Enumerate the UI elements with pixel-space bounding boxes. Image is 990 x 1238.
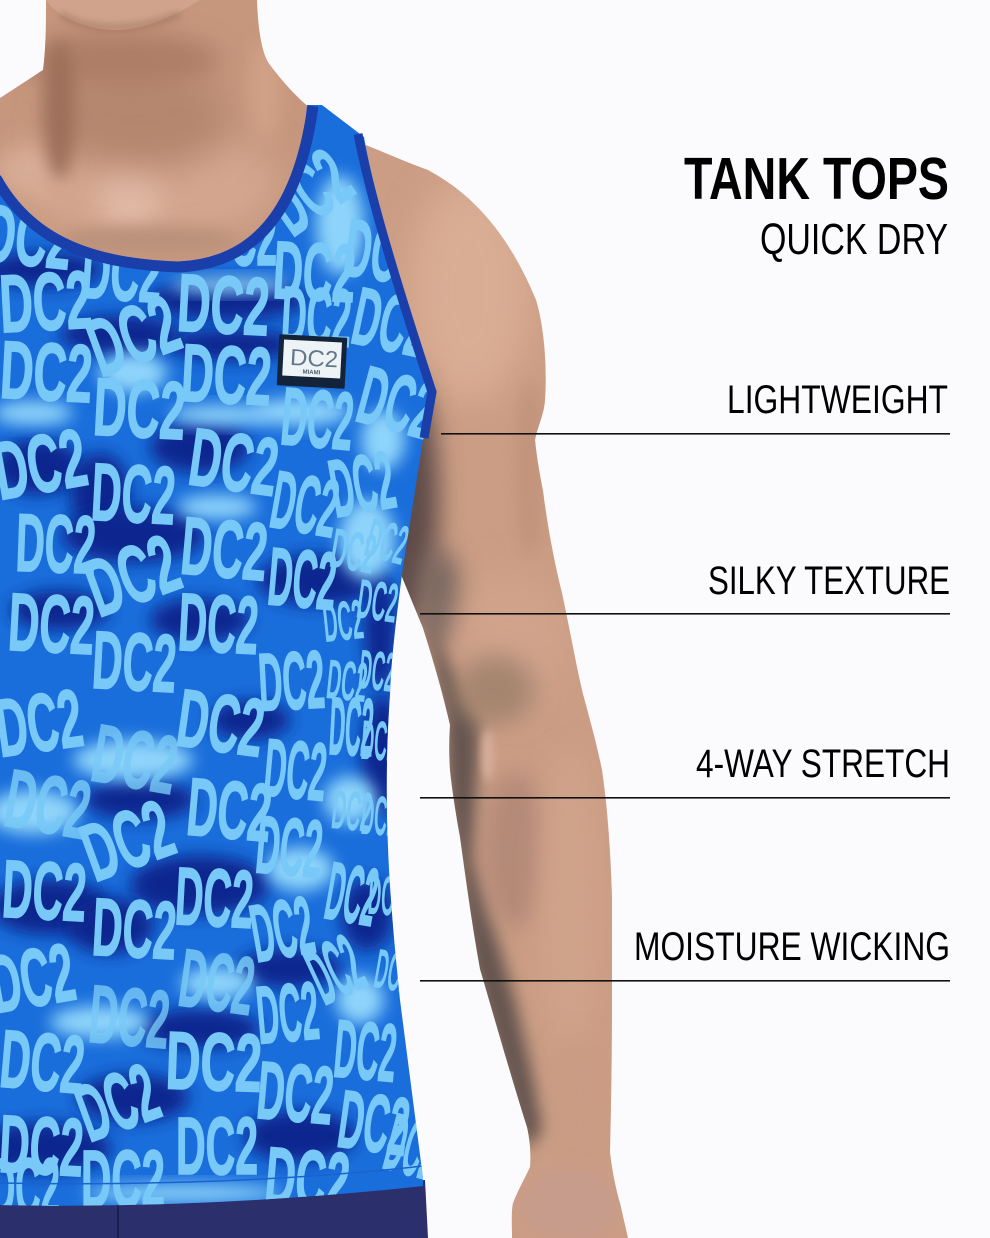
DC2 pattern: DC2 <box>359 708 400 773</box>
DC2 pattern: DC2 <box>253 799 326 896</box>
DC2 pattern: DC2 <box>81 1134 165 1225</box>
arm and shoulder <box>365 144 628 1238</box>
DC2 pattern: DC2 <box>0 1014 88 1112</box>
DC2 pattern: DC2 <box>90 615 179 710</box>
DC2 pattern: DC2 <box>79 224 165 321</box>
DC2 pattern: DC2 <box>0 255 94 350</box>
DC2 pattern: DC2 <box>324 647 370 714</box>
DC2 pattern: DC2 <box>184 762 275 860</box>
DC2 pattern: DC2 <box>349 350 446 457</box>
DC2 pattern: DC2 <box>0 844 89 939</box>
DC2 pattern: DC2 <box>319 846 384 944</box>
patch logo text: DC2 <box>290 344 339 372</box>
DC2 pattern: DC2 <box>86 708 184 812</box>
DC2 pattern: DC2 <box>74 518 191 635</box>
DC2 pattern: DC2 <box>339 203 425 303</box>
DC2 pattern: DC2 <box>254 1045 337 1142</box>
DC2 pattern: DC2 <box>184 412 284 514</box>
armhole trim <box>358 134 432 438</box>
DC2 pattern: DC2 <box>279 270 354 365</box>
DC2 pattern: DC2 <box>366 863 407 928</box>
DC2 pattern: DC2 <box>320 587 366 654</box>
DC2 pattern: DC2 <box>356 637 398 704</box>
DC2 pattern: DC2 <box>176 577 261 672</box>
DC2 pattern: DC2 <box>278 371 357 468</box>
DC2 pattern: DC2 <box>0 753 97 857</box>
DC2 pattern: DC2 <box>89 447 178 542</box>
DC2 pattern: DC2 <box>360 506 415 577</box>
DC2 pattern: DC2 <box>70 783 185 899</box>
figure: torso and arm <box>0 0 640 1238</box>
DC2 pattern: DC2 <box>175 258 272 353</box>
DC2 pattern: DC2 <box>76 278 191 394</box>
DC2 pattern: DC2 <box>253 966 322 1062</box>
neckline trim <box>0 106 313 267</box>
DC2 pattern: DC2 <box>333 1074 415 1174</box>
DC2 pattern: DC2 <box>176 1101 258 1192</box>
DC2 pattern: DC2 <box>203 192 277 283</box>
DC2 pattern: DC2 <box>6 577 97 672</box>
DC2 pattern: DC2 <box>178 501 271 599</box>
DC2 pattern: DC2 <box>264 454 345 555</box>
tank top <box>0 100 448 1233</box>
neck and chest <box>0 0 307 262</box>
DC2 pattern: DC2 <box>265 531 340 628</box>
DC2 pattern: DC2 <box>0 325 95 420</box>
DC2 pattern <box>0 132 448 1233</box>
DC2 pattern: DC2 <box>173 851 256 946</box>
DC2 pattern: DC2 <box>345 271 436 375</box>
DC2 pattern: DC2 <box>179 328 274 423</box>
light dye streaks <box>0 175 405 1202</box>
DC2 pattern: DC2 <box>354 567 402 635</box>
DC2 pattern: DC2 <box>323 435 402 535</box>
dark dye blotches <box>0 252 405 1174</box>
logo patch <box>277 334 347 389</box>
DC2 pattern: DC2 <box>271 225 358 320</box>
DC2 pattern: DC2 <box>359 783 400 848</box>
DC2 pattern: DC2 <box>329 777 375 844</box>
DC2 pattern: DC2 <box>86 969 173 1066</box>
text: DC2 <box>376 1097 448 1198</box>
DC2 pattern: DC2 <box>327 681 376 774</box>
DC2 pattern: DC2 <box>326 516 381 586</box>
DC2 pattern: DC2 <box>174 933 260 1033</box>
shorts waistband <box>0 1180 428 1238</box>
logo patch: MIAMI <box>302 370 321 376</box>
DC2 pattern: DC2 <box>256 634 327 729</box>
DC2 pattern: DC2 <box>250 132 368 253</box>
chin <box>46 0 200 30</box>
DC2 pattern: DC2 <box>172 673 270 775</box>
DC2 pattern: DC2 <box>64 1047 171 1160</box>
printed fabric <box>0 100 448 1233</box>
DC2 pattern: DC2 <box>90 882 179 977</box>
hem stitch <box>0 1166 423 1184</box>
DC2 pattern: DC2 <box>91 362 188 457</box>
DC2 pattern: DC2 <box>370 937 417 1005</box>
DC2 pattern: DC2 <box>244 880 321 980</box>
DC2 pattern: DC2 <box>14 498 98 591</box>
DC2 pattern: DC2 <box>293 918 377 1022</box>
DC2 pattern: DC2 <box>262 1131 353 1229</box>
DC2 pattern: DC2 <box>164 1015 264 1110</box>
DC2 pattern: DC2 <box>0 1099 86 1194</box>
DC2 pattern: DC2 <box>331 1004 400 1100</box>
DC2 pattern: DC2 <box>261 723 330 819</box>
